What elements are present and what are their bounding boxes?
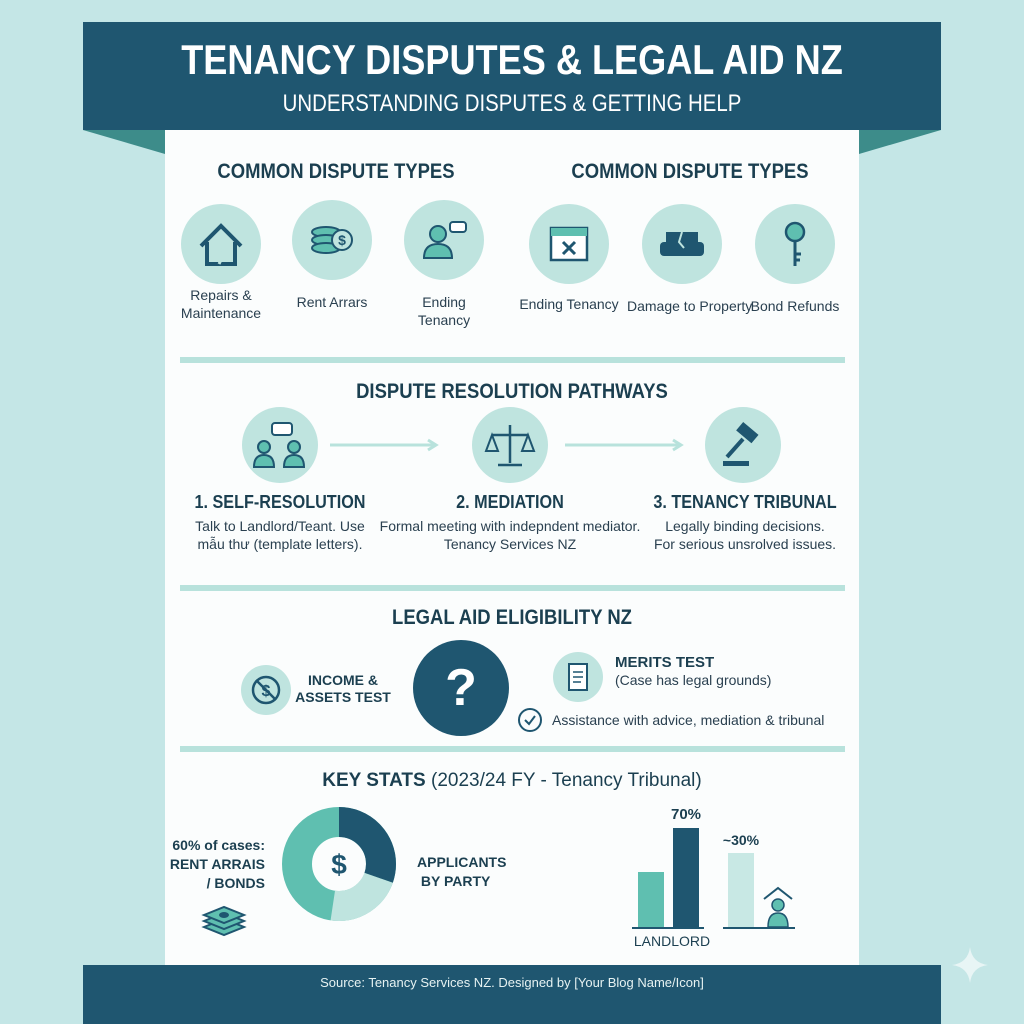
step 1: 1. SELF-RESOLUTION: [194, 492, 366, 512]
heading: DISPUTE RESOLUTION PATHWAYS: [356, 380, 668, 403]
income text: ASSETS TEST: [295, 689, 391, 705]
step 2: [380, 492, 640, 552]
title: TENANCY DISPUTES & LEGAL AID NZ: [181, 36, 843, 83]
bar chart: 70%: [671, 806, 701, 823]
panel: legal aid eligibility: [241, 606, 824, 736]
arrow: [330, 438, 439, 452]
bar chart: LANDLORD: [634, 933, 710, 949]
icon: question: ?: [445, 659, 477, 717]
panel: common dispute types: Damage to Property: [627, 298, 752, 314]
step 1: Talk to Landlord/Teant. Use: [195, 518, 365, 534]
step 2: Tenancy Services NZ: [444, 536, 576, 552]
panel: key stats: [170, 770, 795, 949]
panel: common dispute types: Bond Refunds: [751, 298, 839, 314]
icon: money stack: [202, 906, 246, 936]
applicants label: BY PARTY: [421, 873, 490, 889]
merits text: [615, 654, 771, 688]
icon: key: [755, 204, 835, 284]
bar chart: ~30%: [723, 832, 759, 848]
icon: question: [413, 640, 509, 736]
labels: Maintenance: [181, 305, 261, 321]
icon: check: [518, 708, 542, 732]
panel: common dispute types: Ending Tenancy: [519, 296, 619, 312]
step 2: 2. MEDIATION: [456, 492, 564, 512]
icon: gavel: [705, 407, 781, 483]
icon: scales: [472, 407, 548, 483]
income text: INCOME &: [308, 672, 378, 688]
white panel: [165, 130, 859, 970]
donut chart: [282, 807, 396, 921]
icon: calendar: [529, 204, 609, 284]
bar chart: [632, 806, 795, 949]
heading left: COMMON DISPUTE TYPES: [217, 160, 455, 183]
arrow: [565, 438, 684, 452]
labels: [181, 287, 261, 321]
step 3: Legally binding decisions.: [665, 518, 825, 534]
icon: coins: [292, 200, 372, 280]
applicants label: APPLICANTS: [417, 854, 506, 870]
merits text: MERITS TEST: [615, 654, 714, 671]
step 1: [194, 492, 366, 552]
stat text: 60% of cases:: [172, 837, 265, 853]
applicants label: [417, 854, 506, 889]
icon: sparkle: [952, 948, 988, 982]
icon: house repairs: [181, 204, 261, 284]
step 2: Formal meeting with indepndent mediator.: [380, 518, 640, 534]
panel: common dispute types: Ending: [422, 294, 466, 310]
step 3: [653, 492, 837, 552]
icon: no dollar: [241, 665, 291, 715]
income text: [295, 672, 391, 705]
step 3: For serious unsrolved issues.: [654, 536, 836, 552]
icon: two people: [242, 407, 318, 483]
divider: [180, 357, 845, 363]
labels: Repairs &: [190, 287, 252, 303]
panel: common dispute types: [181, 160, 839, 328]
subtitle: UNDERSTANDING DISPUTES & GETTING HELP: [283, 90, 741, 117]
step 1: mẫu thư (template letters).: [198, 536, 362, 552]
icon: tenant person: [763, 886, 793, 927]
panel: common dispute types: Rent Arrars: [297, 294, 367, 310]
icon: no dollar: $: [262, 683, 271, 700]
stat text: [170, 837, 265, 891]
icon: person speech: [404, 200, 484, 280]
panel: common dispute types: Tenancy: [418, 312, 470, 328]
merits text: (Case has legal grounds): [615, 672, 771, 688]
step 3: 3. TENANCY TRIBUNAL: [653, 492, 837, 512]
icon: coins: $: [338, 232, 346, 248]
assistance text: Assistance with advice, mediation & tribunal: [552, 712, 824, 728]
source text: Source: Tenancy Services NZ. Designed by [Your Blog Name/Icon]: [320, 975, 704, 990]
title banner: [83, 22, 941, 130]
donut chart: $: [331, 849, 347, 880]
stat text: / BONDS: [207, 875, 265, 891]
divider: [180, 746, 845, 752]
heading: LEGAL AID ELIGIBILITY NZ: [392, 606, 632, 629]
icon: broken sofa: [642, 204, 722, 284]
footer: [83, 965, 941, 1024]
heading right: COMMON DISPUTE TYPES: [571, 160, 809, 183]
stat text: RENT ARRAIS: [170, 856, 265, 872]
divider: [180, 585, 845, 591]
icon: scroll: [553, 652, 603, 702]
panel: dispute resolution pathways: [194, 380, 837, 552]
heading: KEY STATS (2023/24 FY - Tenancy Tribunal): [322, 770, 702, 791]
